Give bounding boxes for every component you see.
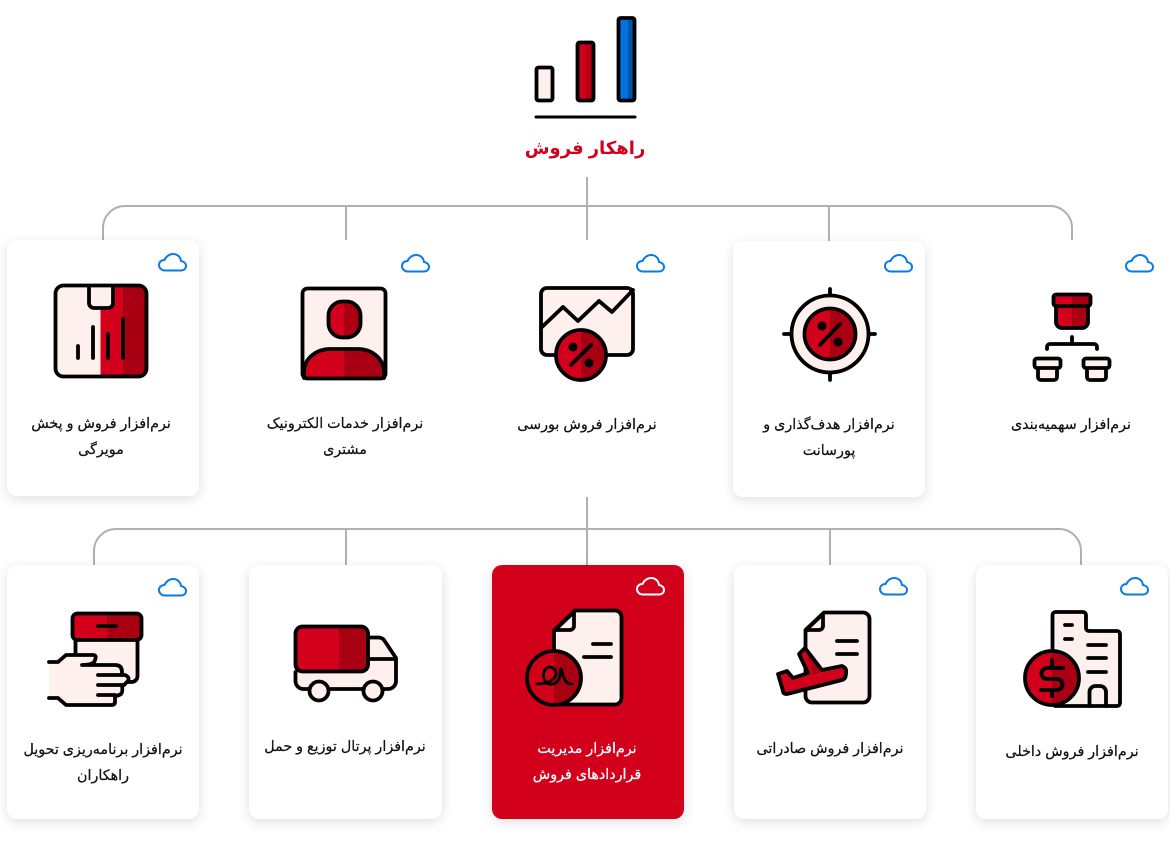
card: domestic sales software (976, 565, 1168, 819)
icon: box with bars (54, 284, 148, 378)
label: نرم‌افزار پرتال توزیع و حمل (264, 739, 426, 755)
card: distribution software (7, 240, 199, 496)
card: export sales software (734, 565, 926, 819)
label: نرم‌افزار فروش داخلی (1005, 744, 1139, 760)
icon: signed contract (525, 608, 624, 707)
label (31, 416, 171, 458)
icon: export document and plane (776, 610, 872, 704)
title: راهکار فروش (525, 138, 645, 158)
icon: cloud (636, 254, 665, 272)
label: مشتری (323, 442, 367, 458)
card: sales contract management software (highlighted) (492, 565, 684, 819)
label (23, 742, 183, 784)
icon: quota hierarchy (1032, 292, 1112, 382)
label (267, 416, 423, 458)
label: مویرگی (78, 442, 124, 458)
label: پورسانت (803, 443, 855, 459)
icon: cloud (401, 254, 430, 272)
card: stock exchange sales software (491, 240, 684, 496)
icon: cloud (158, 578, 187, 596)
icon: percent target (782, 287, 877, 382)
icon: cloud (636, 577, 665, 596)
card: target and commission software (733, 241, 925, 497)
label: نرم‌افزار سهمیه‌بندی (1011, 417, 1131, 433)
icon: main bar chart (534, 16, 636, 118)
icon: cloud (158, 253, 187, 272)
icon: hand holding box (47, 612, 144, 707)
label (533, 741, 641, 783)
card: distribution portal software (249, 565, 442, 819)
label: نرم‌افزار فروش بورسی (517, 417, 657, 433)
icon: truck (294, 624, 398, 702)
icon: user portrait (300, 286, 388, 380)
icon: building with dollar (1023, 610, 1122, 708)
label: نرم‌افزار خدمات الکترونیک (267, 416, 423, 432)
label: نرم‌افزار فروش و پخش (31, 416, 171, 432)
label: نرم‌افزار فروش صادراتی (757, 741, 903, 757)
icon: chart with percent (539, 286, 635, 382)
icon: cloud (1125, 254, 1154, 272)
icon: cloud (884, 254, 913, 272)
label (762, 416, 895, 459)
card: dealer delivery planning software (7, 565, 199, 819)
label: راهکاران (77, 768, 129, 784)
card: quota software (975, 240, 1168, 496)
label: نرم‌افزار برنامه‌ریزی تحویل (23, 742, 183, 758)
icon: cloud (1120, 577, 1149, 596)
icon: cloud (879, 577, 908, 596)
card: customer e-service software (249, 240, 442, 496)
label: قراردادهای فروش (533, 767, 641, 783)
label: نرم‌افزار هدف‌گذاری و (763, 417, 895, 433)
label: نرم‌افزار مدیریت (537, 741, 637, 757)
